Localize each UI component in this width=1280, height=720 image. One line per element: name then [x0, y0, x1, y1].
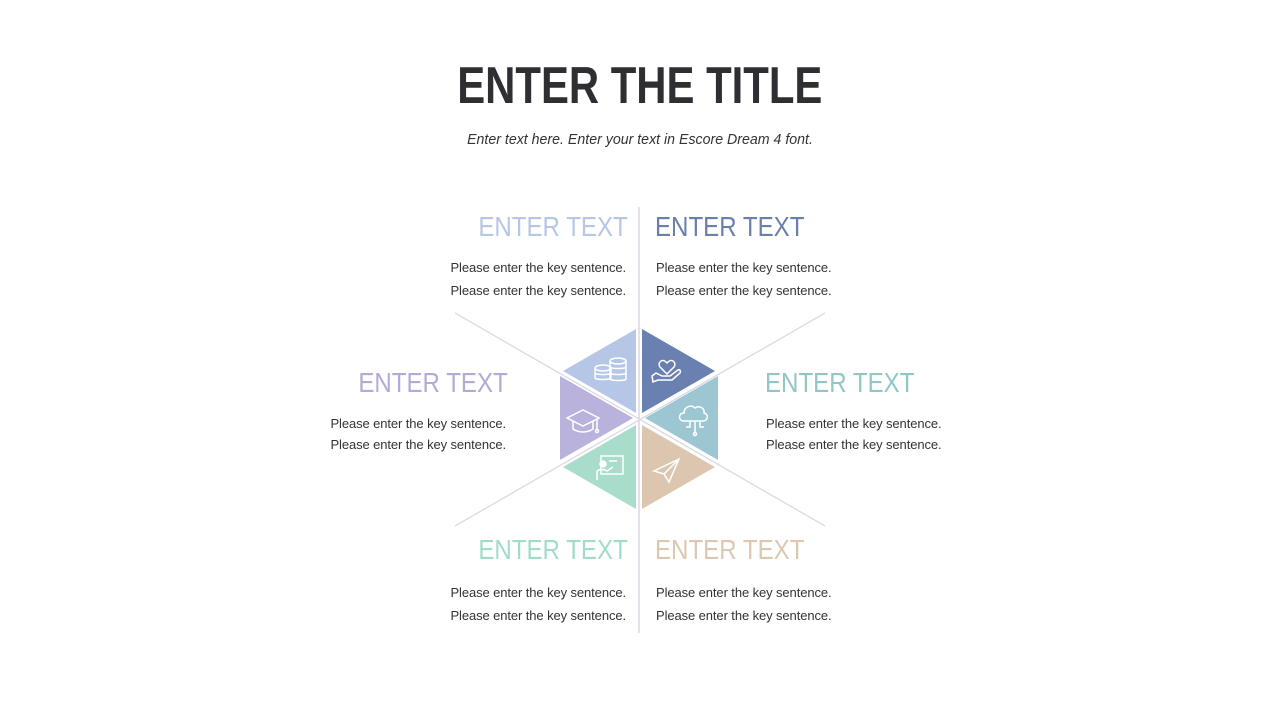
segment: right: [645, 376, 718, 460]
text: Please enter the key sentence.: [656, 608, 832, 623]
text: Please enter the key sentence.: [766, 416, 942, 431]
heading: ENTER TEXT: [359, 367, 508, 398]
text: Please enter the key sentence.: [656, 283, 832, 298]
text: [450, 585, 626, 623]
heading: ENTER TEXT: [655, 534, 804, 565]
icon: cloud: [680, 406, 707, 436]
text: [330, 416, 506, 452]
text: Please enter the key sentence.: [656, 585, 832, 600]
block: bottom-right: [655, 534, 832, 623]
icon: teacher board: [597, 456, 623, 480]
text: Please enter the key sentence.: [450, 283, 626, 298]
block: bottom-left: [450, 534, 628, 623]
segment: top-left: [563, 329, 636, 413]
text: Please enter the key sentence.: [330, 416, 506, 431]
text: Please enter the key sentence.: [766, 437, 942, 452]
segment: top-right: [642, 329, 715, 413]
title: ENTER THE TITLE: [457, 57, 823, 115]
text: Please enter the key sentence.: [450, 585, 626, 600]
heading: ENTER TEXT: [479, 211, 628, 242]
text: [450, 260, 626, 298]
text: Please enter the key sentence.: [330, 437, 506, 452]
text: Please enter the key sentence.: [450, 260, 626, 275]
heading: ENTER TEXT: [479, 534, 628, 565]
text: [766, 416, 942, 452]
segment: bottom-right: [642, 425, 715, 509]
segment: left: [560, 376, 633, 460]
text: [656, 260, 832, 298]
icon: graduation cap: [567, 410, 599, 432]
text: Please enter the key sentence.: [656, 260, 832, 275]
block: right: [765, 367, 942, 452]
icon: coins: [595, 358, 626, 380]
block: top-left: [450, 211, 628, 298]
block: top-right: [655, 211, 832, 298]
icon: hand heart: [652, 361, 680, 382]
heading: ENTER TEXT: [765, 367, 914, 398]
heading: ENTER TEXT: [655, 211, 804, 242]
text: [656, 585, 832, 623]
block: left: [330, 367, 508, 452]
icon: paper plane: [654, 459, 679, 482]
text: Please enter the key sentence.: [450, 608, 626, 623]
subtitle: Enter text here. Enter your text in Escore Dream 4 font.: [467, 131, 813, 148]
segment: bottom-left: [563, 425, 636, 509]
